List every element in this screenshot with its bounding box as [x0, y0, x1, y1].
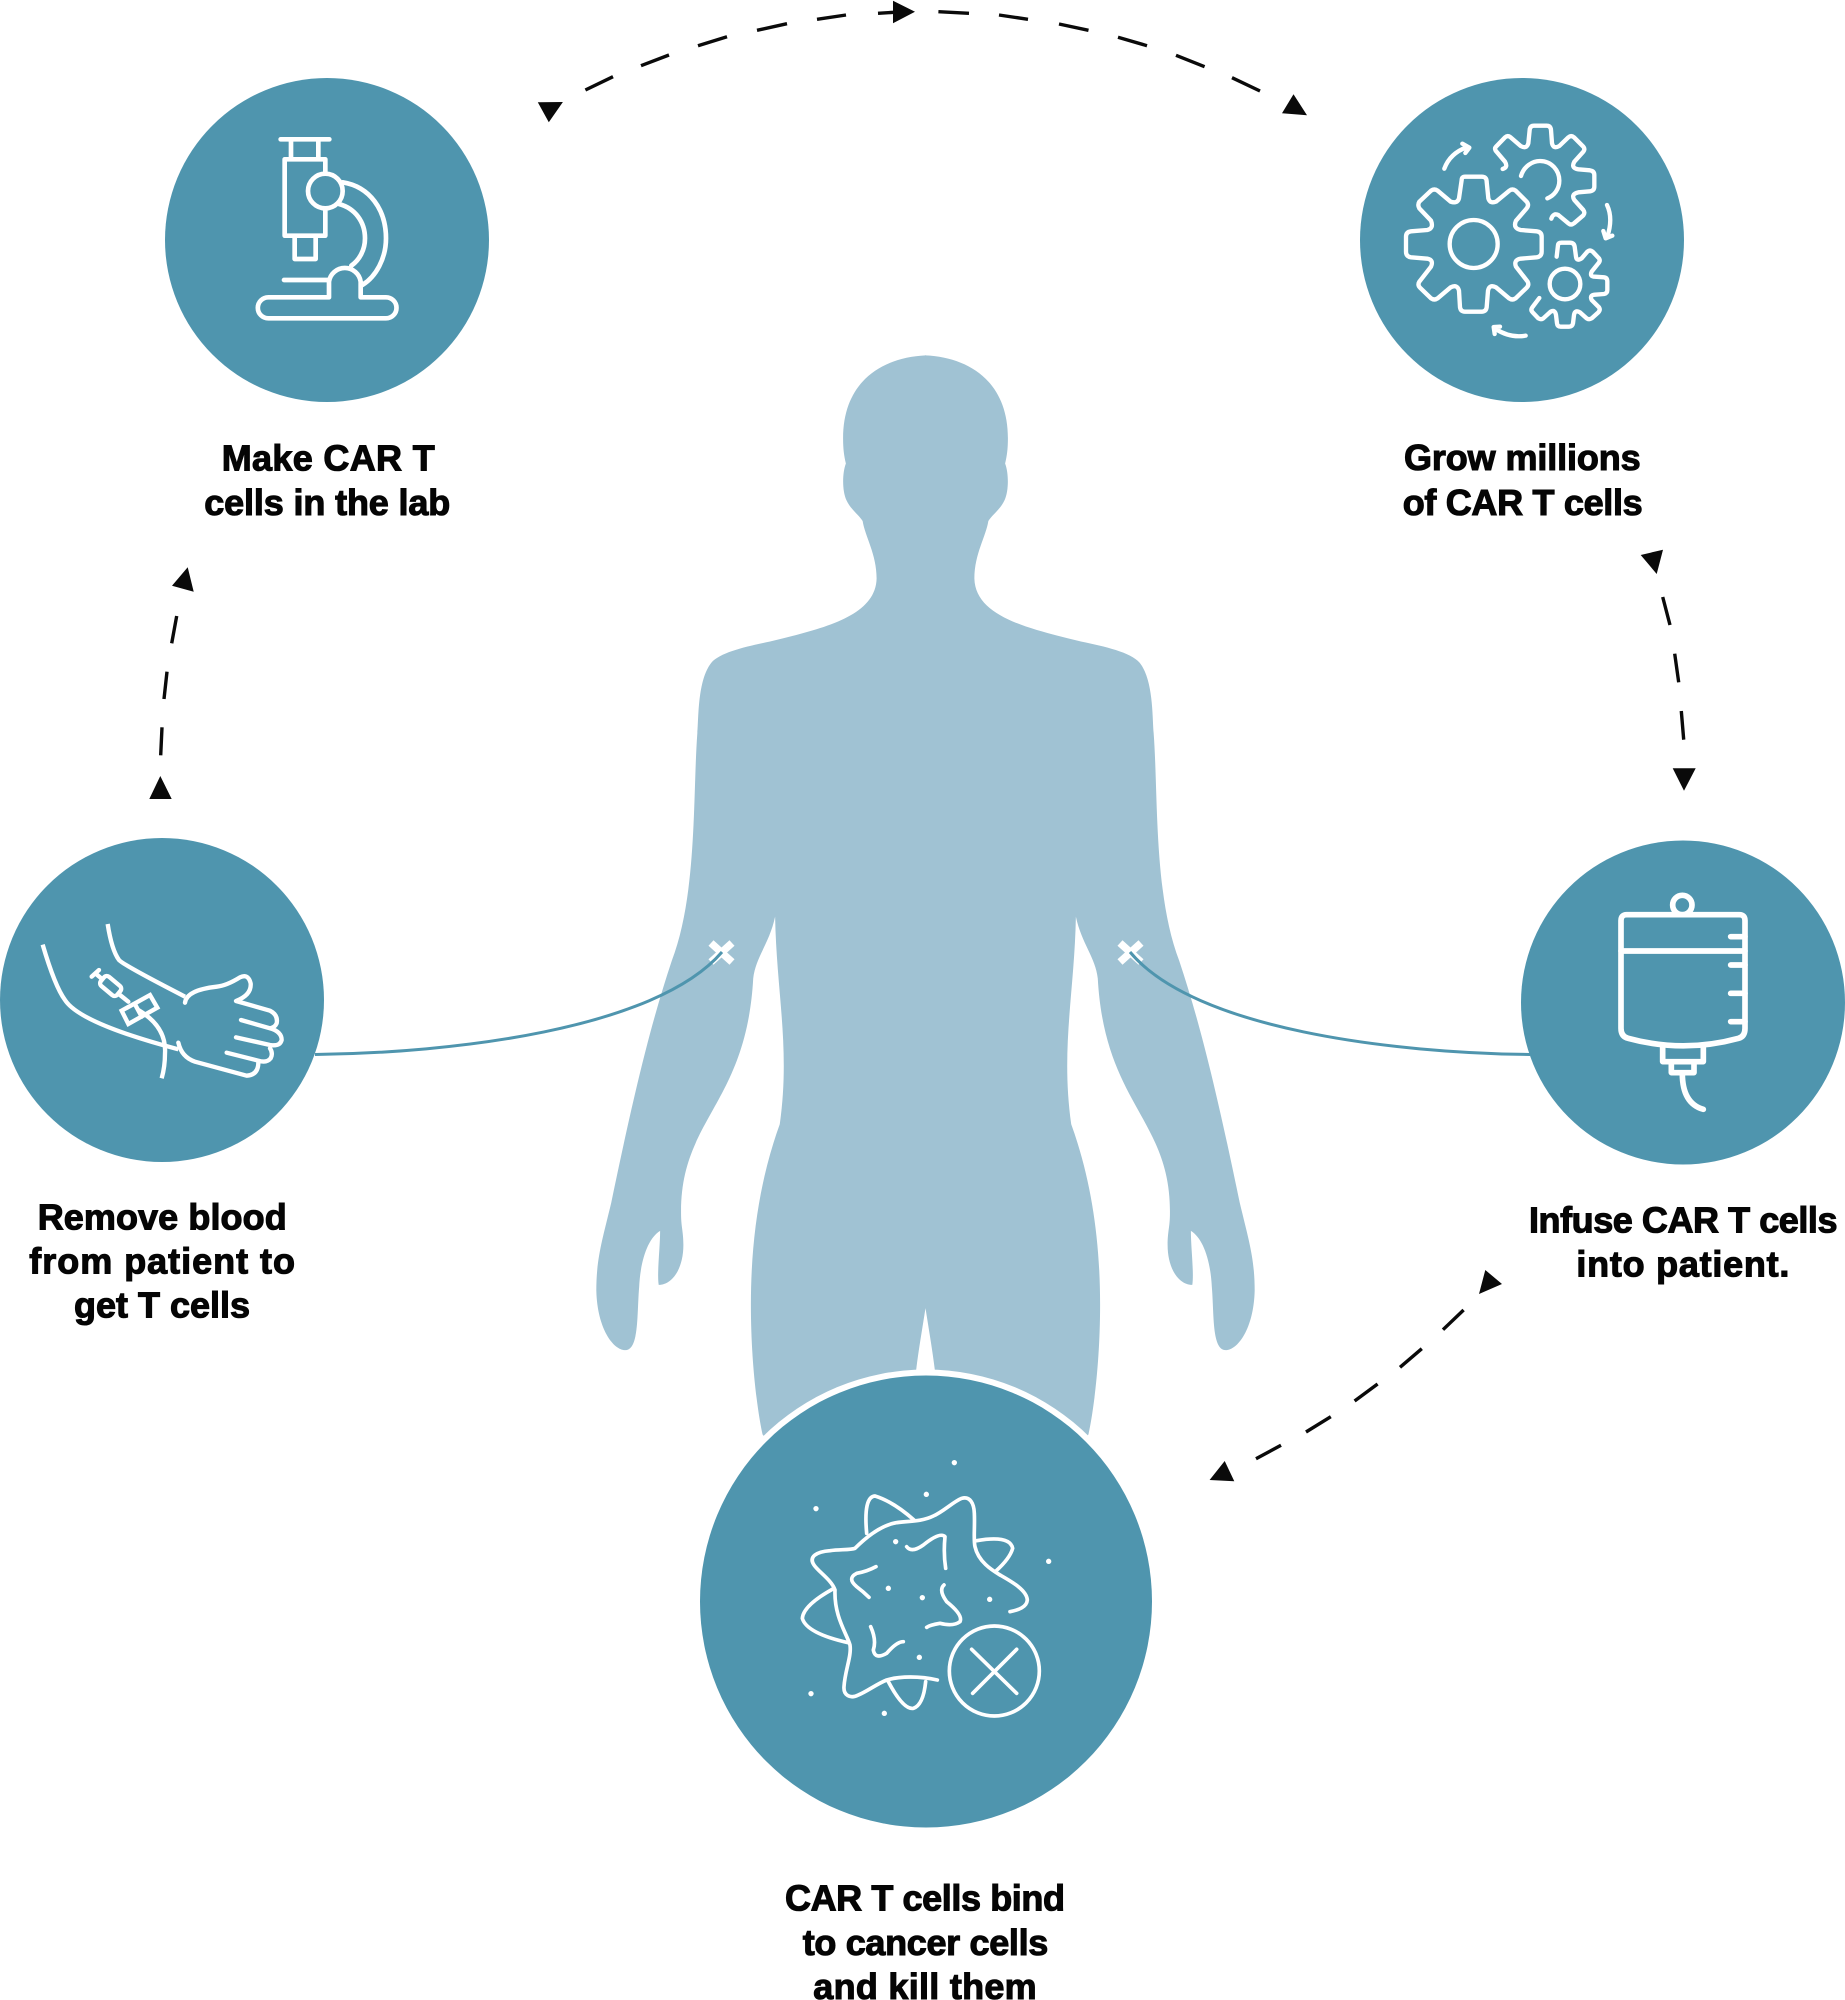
arrow: dashed arc lab to grow: [538, 1, 1307, 122]
label: grow millions: [1403, 437, 1643, 523]
step: make CAR T cells in the lab: [165, 78, 489, 523]
label: remove blood: from patient to: [29, 1240, 295, 1281]
circle: kill cancer: [700, 1376, 1152, 1828]
connector line: blood removal to arm: [315, 952, 722, 1054]
icon: gears: [1406, 126, 1612, 336]
step: CAR T cells bind and kill cancer: [694, 1370, 1158, 2000]
label: bind and kill: to cancer cells: [803, 1922, 1048, 1963]
label: make CAR T cells: Make CAR T: [222, 438, 435, 479]
arrow: dashed arc blood to lab: [149, 567, 194, 799]
label: infuse: into patient.: [1576, 1244, 1789, 1285]
human body silhouette: [596, 355, 1255, 1476]
circle: remove blood: [0, 838, 324, 1162]
icon: cancer cell with cross: [802, 1460, 1051, 1716]
icon: arm with syringe: [43, 924, 282, 1078]
label: make CAR T cells: [204, 438, 450, 523]
arrow: dashed arc infuse to kill: [1210, 1270, 1502, 1481]
circle: infuse: [1521, 840, 1845, 1164]
label: infuse: [1529, 1199, 1838, 1285]
circle: grow: [1360, 78, 1684, 402]
label: remove blood: Remove blood: [38, 1196, 287, 1237]
label: infuse: Infuse CAR T cells: [1529, 1199, 1838, 1240]
label: remove blood: get T cells: [74, 1284, 250, 1325]
icon: microscope: [258, 139, 396, 318]
icon: IV bag: [1621, 895, 1745, 1109]
label: grow millions: Grow millions: [1404, 437, 1641, 478]
step: remove blood from patient: [0, 838, 324, 1325]
label: remove blood: [29, 1196, 295, 1325]
label: bind and kill: CAR T cells bind: [785, 1878, 1065, 1919]
circle: lab: [165, 78, 489, 402]
arrow: dashed arc grow to infuse: [1641, 550, 1696, 791]
label: grow millions: of CAR T cells: [1403, 482, 1643, 523]
connector line: infusion to arm: [1130, 952, 1530, 1054]
label: bind and kill: [785, 1878, 1065, 2000]
injection mark: right arm: [1120, 943, 1141, 962]
white ring behind circle: [694, 1370, 1158, 1834]
step: infuse CAR T cells into patient: [1521, 840, 1845, 1285]
label: make CAR T cells: cells in the lab: [204, 482, 450, 523]
step: grow millions of CAR T cells: [1360, 78, 1684, 523]
injection mark: left arm: [711, 943, 732, 962]
